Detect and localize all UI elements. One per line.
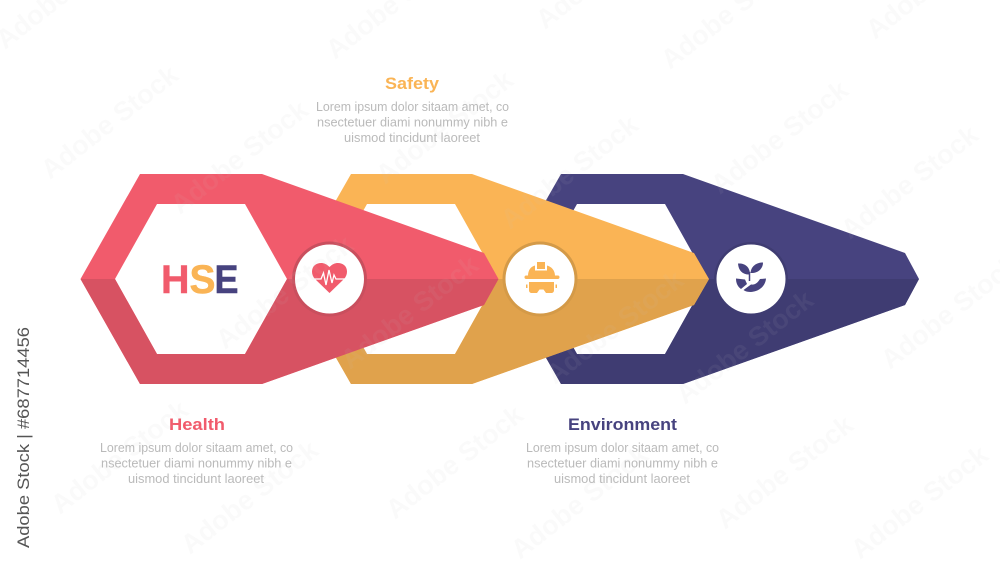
- text block: health: uismod tincidunt laoreet: [128, 471, 264, 486]
- watermark pattern: Adobe Stock: [210, 229, 360, 355]
- text block: safety: Lorem ipsum dolor sitaam amet, co: [316, 99, 509, 114]
- text block: safety: Safety: [385, 74, 440, 93]
- watermark pattern: Adobe Stock: [35, 59, 185, 185]
- text block: environment: Environment: [568, 415, 677, 434]
- watermark pattern: Adobe Stock: [835, 119, 985, 245]
- watermark pattern: Adobe Stock: [370, 64, 520, 190]
- watermark pattern: Adobe Stock: [335, 249, 485, 375]
- HSE logo text: H: [161, 258, 190, 302]
- watermark pattern: Adobe Stock: [380, 399, 530, 525]
- panel: health arrow: [80, 174, 498, 384]
- watermark pattern: Adobe Stock: [175, 434, 325, 560]
- watermark pattern: Adobe Stock: [845, 439, 995, 563]
- panel: safety arrow: [336, 174, 709, 384]
- watermark pattern: Adobe Stock: [705, 74, 855, 200]
- watermark pattern: Adobe Stock: [495, 109, 645, 235]
- panel: environment arrow: [546, 174, 919, 384]
- HSE logo text: E: [214, 258, 238, 302]
- text block: safety: uismod tincidunt laoreet: [344, 130, 480, 145]
- icon: heart badge: [292, 242, 367, 316]
- text block: environment: Lorem ipsum dolor sitaam amet, co: [526, 440, 719, 455]
- watermark pattern: Adobe Stock: [45, 394, 195, 520]
- text block: health: Lorem ipsum dolor sitaam amet, co: [100, 440, 293, 455]
- icon: plant in hand badge: [714, 242, 788, 316]
- watermark pattern: Adobe Stock: [165, 94, 315, 220]
- text block: environment: [526, 415, 719, 486]
- watermark pattern: Adobe Stock: [505, 439, 655, 563]
- watermark pattern: Adobe Stock: [540, 264, 690, 390]
- text block: health: [100, 415, 293, 486]
- stock id side label: Adobe Stock | #687714456: [14, 327, 33, 548]
- text block: safety: nsectetuer diami nonummy nibh e: [317, 114, 508, 130]
- watermark pattern: Adobe Stock: [670, 284, 820, 410]
- icon: safety helmet badge: [502, 242, 578, 316]
- watermark pattern: Adobe Stock: [710, 409, 860, 535]
- text block: health: Health: [169, 415, 225, 434]
- text block: environment: uismod tincidunt laoreet: [554, 471, 690, 486]
- HSE logo text: [161, 258, 238, 302]
- text block: health: nsectetuer diami nonummy nibh e: [101, 456, 292, 470]
- HSE logo text: S: [190, 258, 216, 302]
- text block: environment: nsectetuer diami nonummy nibh e: [527, 456, 718, 470]
- text block: safety: [316, 74, 509, 145]
